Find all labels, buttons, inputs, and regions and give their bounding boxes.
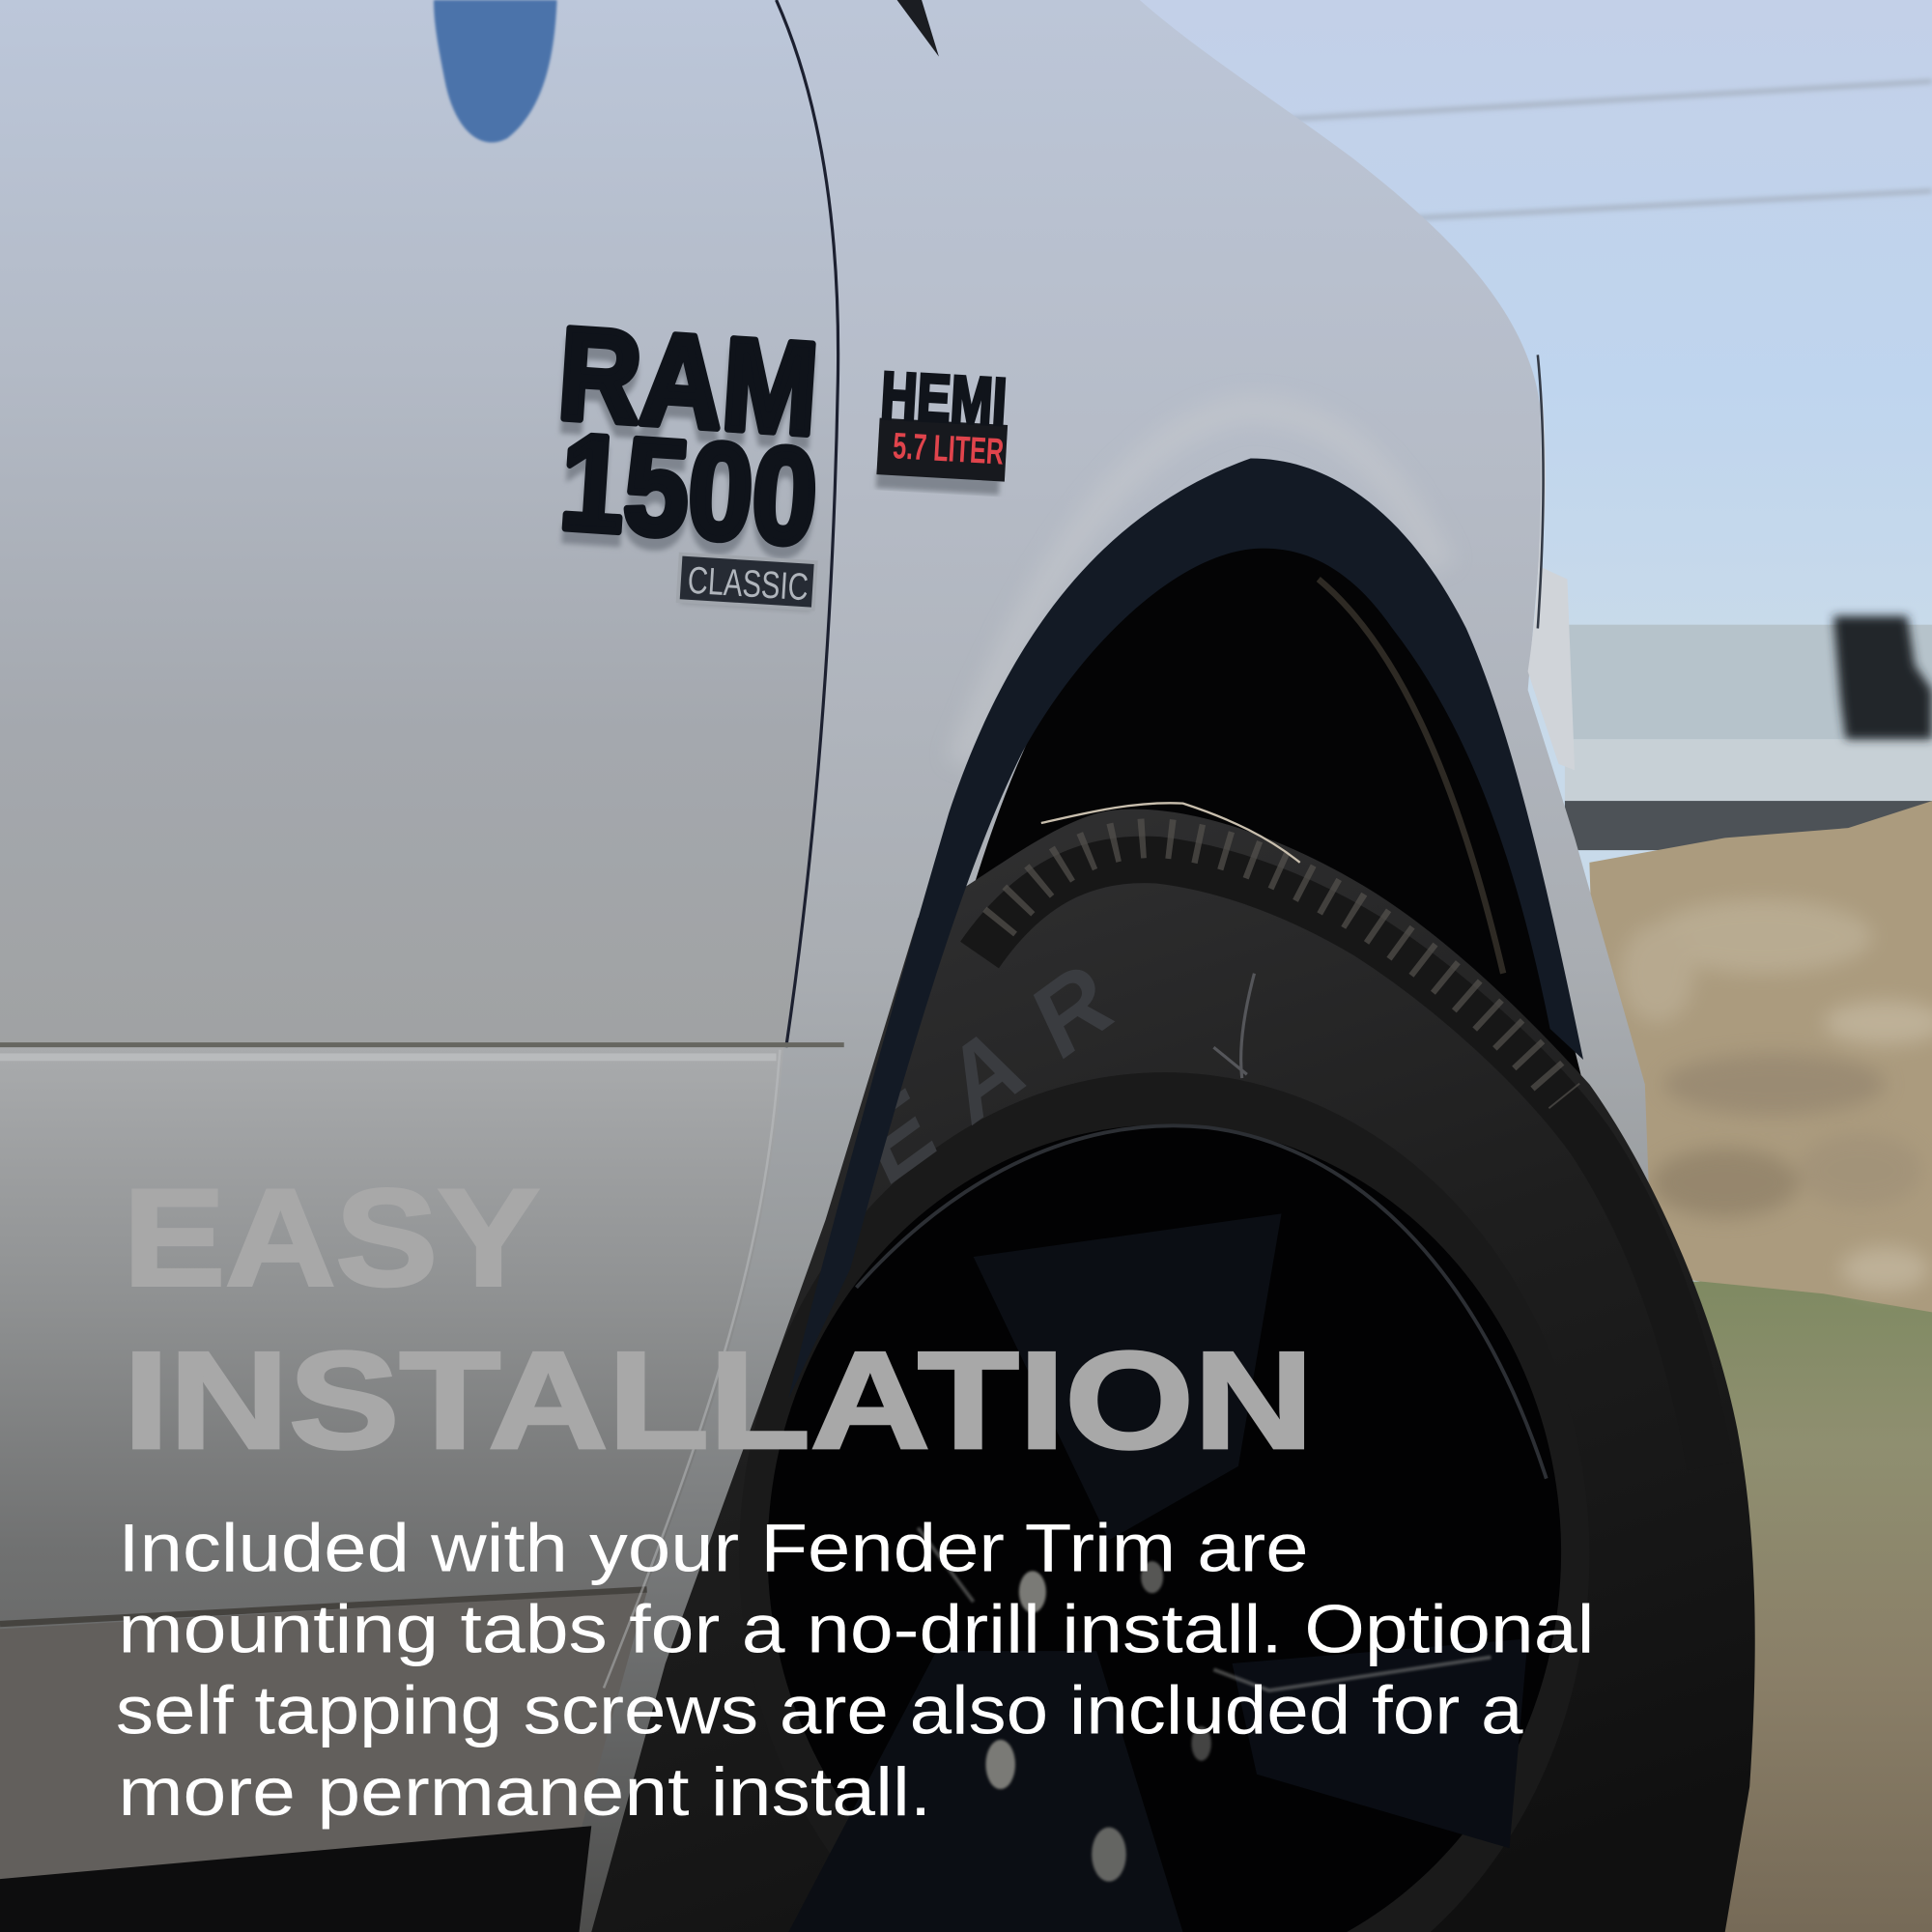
tire tread xyxy=(980,860,1710,1466)
emblem drop shadow xyxy=(547,312,828,585)
emblem: RAM 1500 xyxy=(547,300,828,585)
emblem lettering: RAM xyxy=(554,300,822,463)
wheel spokes xyxy=(788,1213,1282,1932)
fender flare xyxy=(788,458,1583,1399)
title xyxy=(124,1161,1314,1478)
body copy xyxy=(116,1509,1595,1830)
emblem: CLASSIC: CLASSIC xyxy=(687,559,810,609)
chalk mark xyxy=(1213,974,1254,1078)
body copy: more permanent install. xyxy=(118,1753,931,1830)
door panel xyxy=(0,0,838,1047)
body copy: mounting tabs for a no-drill install. Optional xyxy=(118,1590,1595,1666)
emblem: HEMI 5.7 LITER: 5.7 LITER xyxy=(892,425,1005,473)
emblem: HEMI 5.7 LITER: HEMI xyxy=(879,358,1009,440)
emblem lettering: 1500 xyxy=(556,405,821,573)
title: INSTALLATION xyxy=(124,1324,1314,1478)
sidewall ring xyxy=(739,1072,1589,1932)
tire and wheel xyxy=(591,810,1755,1932)
lower door panel xyxy=(0,1047,783,1886)
body copy: Included with your Fender Trim are xyxy=(118,1509,1309,1585)
lug nuts xyxy=(985,1561,1211,1882)
wheel rim xyxy=(768,1124,1561,1932)
emblem drop shadow: RAM xyxy=(554,312,821,474)
sill xyxy=(0,1592,647,1886)
emblem lettering xyxy=(548,300,828,573)
wheel arch body ridge xyxy=(961,409,1441,764)
title: EASY xyxy=(124,1161,540,1315)
tire highlight strand xyxy=(1041,803,1300,863)
tire sidewall lettering: EAR xyxy=(837,944,1134,1204)
emblem drop shadow: 1500 xyxy=(555,417,821,585)
door seam and crease lines xyxy=(777,0,838,1047)
body copy: self tapping screws are also included for a xyxy=(116,1672,1524,1748)
inner liner edge xyxy=(1319,579,1503,974)
emblem: HEMI 5.7 LITER xyxy=(876,358,1011,496)
wheel well xyxy=(974,542,1583,1084)
emblem: CLASSIC xyxy=(678,554,816,611)
tail light edge xyxy=(1528,355,1575,770)
window reflection xyxy=(434,0,557,142)
